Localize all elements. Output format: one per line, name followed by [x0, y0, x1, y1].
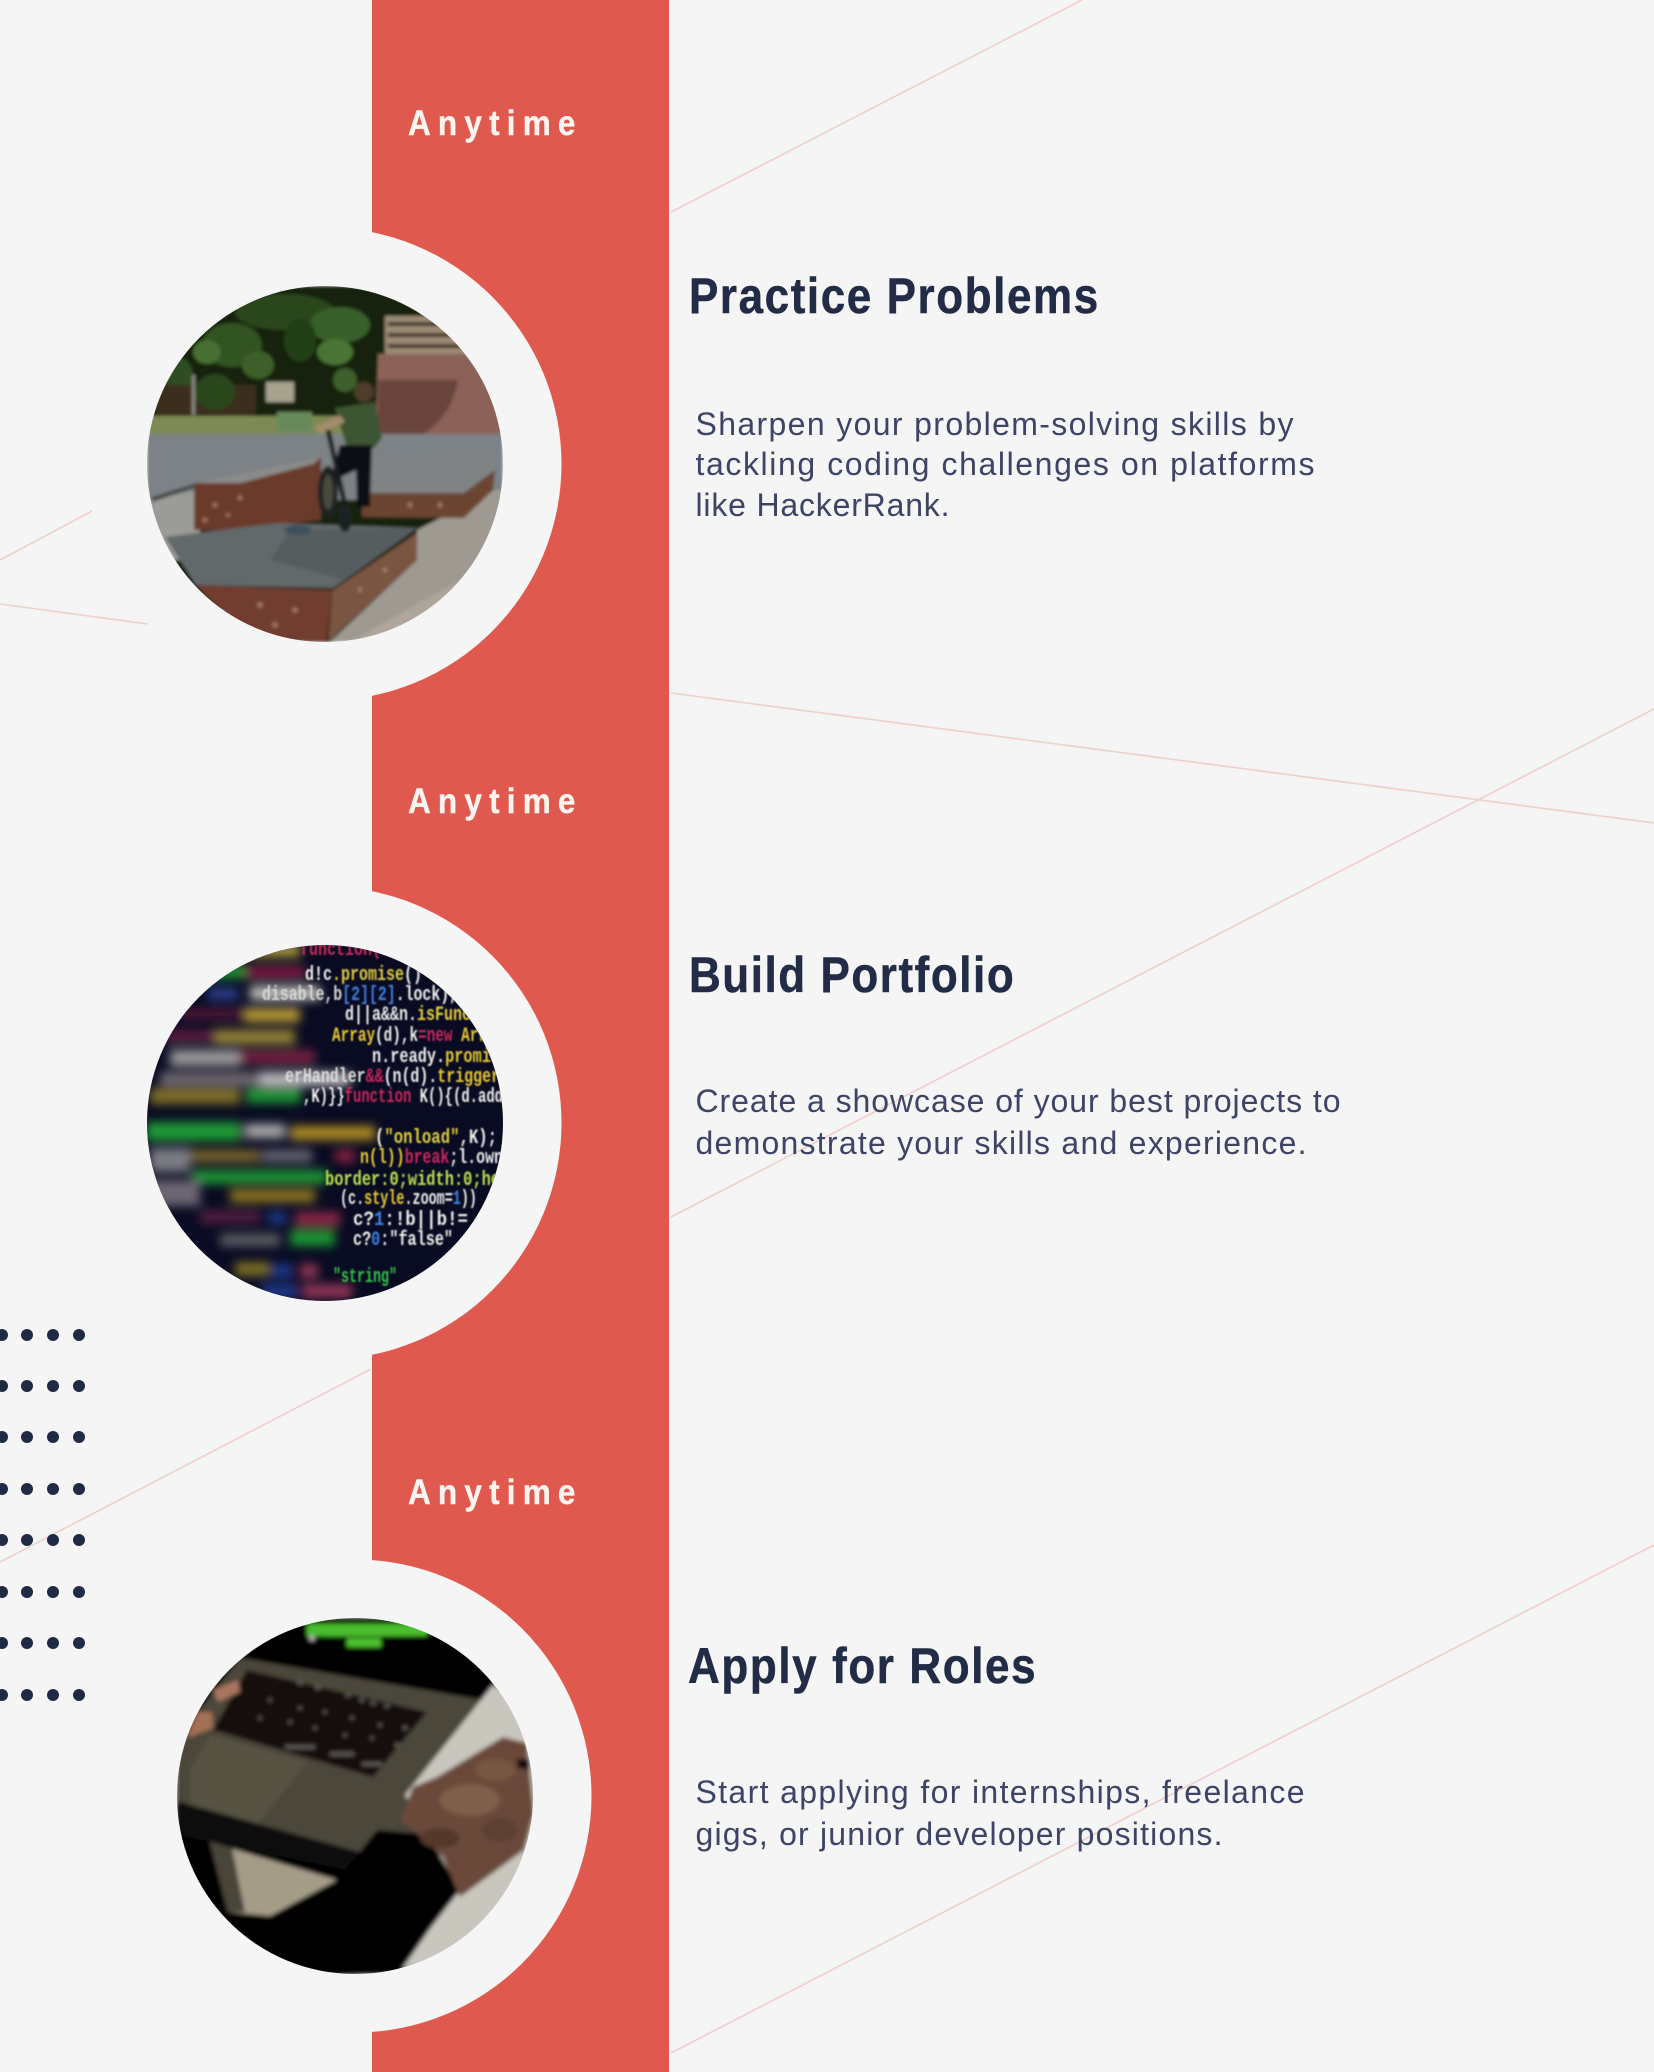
soft code text: Array(d),k=new Arr	[332, 1025, 487, 1048]
text block: Apply for Roles description: gigs, or junior developer positions.	[696, 1816, 1222, 1852]
soft code text: function(b)	[300, 939, 399, 962]
soft code text: c?1:!b||b!=	[353, 1209, 468, 1232]
text block: Practice Problems description: tackling coding challenges on platforms	[696, 446, 1314, 482]
text block: Build Portfolio description: Create a showcase of your best projects to	[696, 1083, 1340, 1119]
text block: Apply for Roles description	[696, 1774, 1304, 1852]
text block: Practice Problems description	[696, 406, 1314, 523]
soft code text: d||a&&n.isFunc	[345, 1004, 471, 1027]
label: Anytime (1): Anytime	[408, 105, 575, 143]
text block: Build Portfolio description	[696, 1083, 1340, 1161]
heading: Apply for Roles: Apply for Roles	[688, 1637, 1036, 1694]
photo: colourful source code on screen	[146, 939, 503, 1301]
photo: hands on a laptop keyboard	[176, 1618, 540, 1980]
soft code text: disable,b[2][2].lock),e	[262, 984, 467, 1007]
text block: Build Portfolio description: demonstrate your skills and experience.	[696, 1125, 1306, 1161]
photo: BMX rider at skatepark	[147, 286, 503, 642]
soft code text: border:0;width:0;he	[325, 1169, 500, 1192]
soft code text: n(l))break;l.own	[360, 1147, 503, 1170]
text block: Apply for Roles description: Start applying for internships, freelance	[696, 1774, 1304, 1810]
red vertical timeline band	[372, 0, 669, 2072]
circular notches in band	[88, 228, 592, 2032]
soft code text: ,K)}}function K(){(d.add	[303, 1086, 503, 1109]
text block: Practice Problems description: Sharpen your problem-solving skills by	[696, 406, 1294, 442]
dot grid pattern	[0, 1329, 85, 1701]
text block: Practice Problems description: like HackerRank.	[696, 487, 950, 523]
soft code text: (c.style.zoom=1))	[340, 1188, 477, 1211]
soft code text: erHandler&&(n(d).trigger	[285, 1066, 500, 1089]
heading: Practice Problems: Practice Problems	[689, 267, 1098, 324]
blurred code rows	[146, 944, 375, 1298]
heading: Build Portfolio: Build Portfolio	[689, 946, 1014, 1003]
label: Anytime (3): Anytime	[408, 1474, 575, 1512]
soft code text	[262, 939, 503, 1289]
soft code text: "string"	[333, 1266, 397, 1289]
soft code text: ("onload",K);	[375, 1127, 497, 1150]
label: Anytime (2): Anytime	[408, 783, 575, 821]
soft code text: d!c.promise()	[305, 964, 422, 987]
soft code text: n.ready.promis	[372, 1046, 500, 1069]
soft code text: c?0:"false"	[353, 1229, 453, 1252]
